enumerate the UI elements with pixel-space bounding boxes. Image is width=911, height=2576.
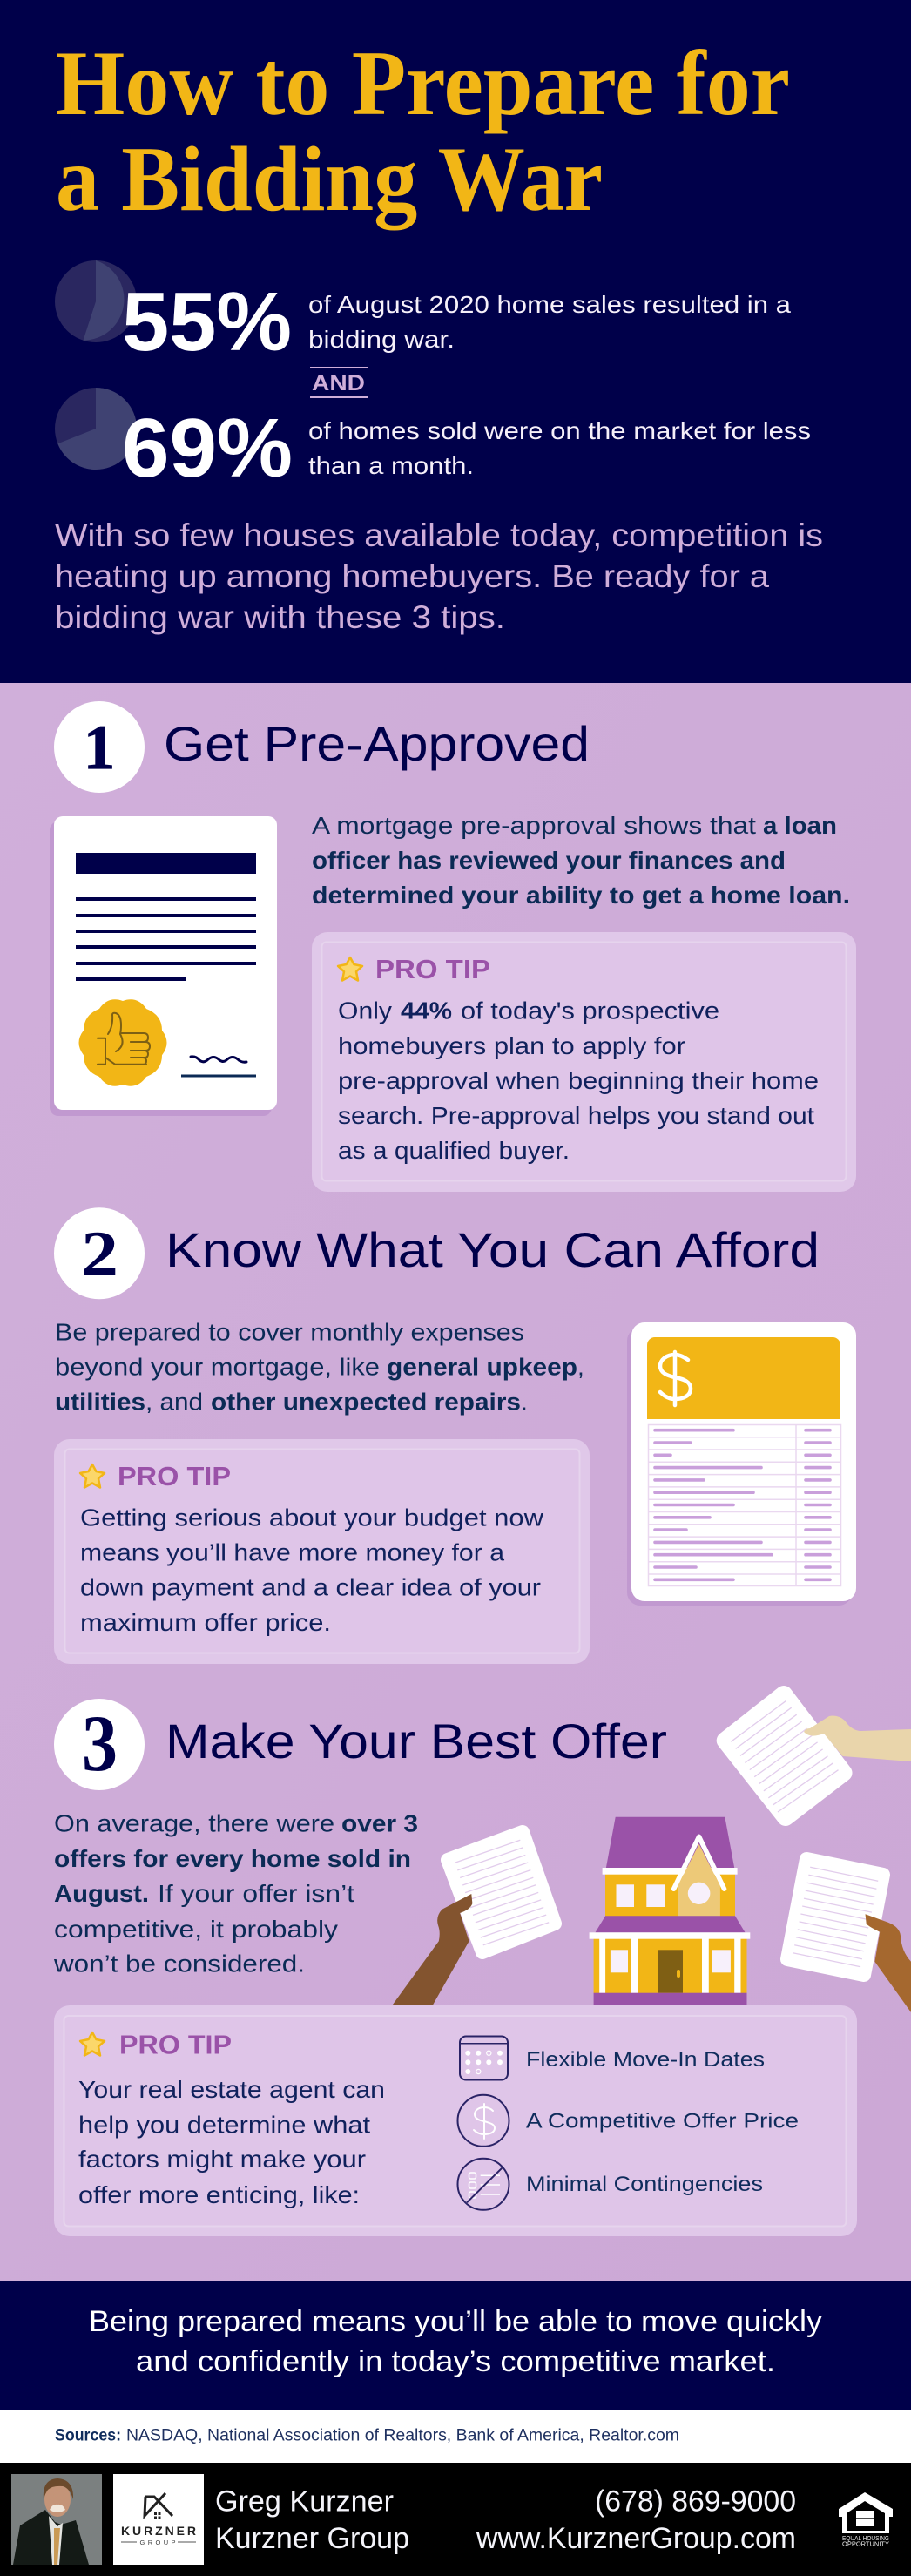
contact details bbox=[476, 2485, 796, 2555]
sources: Sources: bbox=[55, 2427, 121, 2445]
stat: 69 percent: than a month. bbox=[308, 452, 474, 479]
pro tip heading: PRO TIP bbox=[119, 2030, 232, 2059]
pro tip text: help you determine what bbox=[78, 2112, 370, 2139]
icon: equal housing opportunity: EQUAL HOUSING bbox=[842, 2536, 889, 2542]
panel: pro tip 3 bbox=[54, 2005, 857, 2236]
step 1 text: a loan bbox=[763, 812, 837, 839]
step 3 text: offers for every home sold in bbox=[54, 1845, 411, 1872]
panel: tips background bbox=[0, 683, 911, 2281]
pro tip text: homebuyers plan to apply for bbox=[338, 1032, 685, 1059]
illustration: offers around a house bbox=[392, 1694, 911, 2012]
icon: crossed-out list bbox=[458, 2159, 509, 2210]
title bbox=[56, 32, 790, 230]
step 2 text: , bbox=[577, 1354, 584, 1381]
icon: approved document bbox=[50, 816, 277, 1116]
step 1 text: A mortgage pre-approval shows that bbox=[312, 812, 756, 839]
agent footer bbox=[0, 2463, 911, 2576]
step 2 heading: Know What You Can Afford bbox=[165, 1222, 820, 1277]
step 3 text: On average, there were bbox=[54, 1810, 334, 1836]
step 2 heading bbox=[54, 1207, 820, 1299]
label: flexible dates: Flexible Move-In Dates bbox=[526, 2048, 765, 2072]
pro tip text: down payment and a clear idea of your bbox=[80, 1573, 541, 1600]
company logo: GROUP bbox=[139, 2539, 176, 2546]
agent name bbox=[215, 2485, 409, 2555]
company logo: KURZNER bbox=[121, 2524, 196, 2538]
step 2 text: . bbox=[521, 1389, 528, 1416]
budget table bbox=[648, 1425, 841, 1585]
pro tip text: maximum offer price. bbox=[80, 1609, 331, 1636]
closing banner bbox=[0, 2281, 911, 2410]
step 3 text: over 3 bbox=[341, 1810, 418, 1836]
agent name: Kurzner Group bbox=[215, 2522, 409, 2555]
icon: star bbox=[80, 1464, 105, 1488]
company logo bbox=[113, 2474, 204, 2565]
stat: 55 percent: bidding war. bbox=[308, 326, 455, 353]
label: offer price: A Competitive Offer Price bbox=[526, 2110, 799, 2133]
paper: top right bbox=[725, 1694, 843, 1817]
pro tip heading: PRO TIP bbox=[118, 1461, 231, 1491]
icon: budget sheet bbox=[627, 1322, 856, 1606]
intro text: bidding war with these 3 tips. bbox=[55, 599, 505, 635]
step 2 text: other unexpected repairs bbox=[211, 1389, 521, 1416]
panel: pro tip 1 bbox=[312, 932, 856, 1192]
step 1 heading: 1 bbox=[84, 713, 115, 782]
step 3 text bbox=[53, 1810, 418, 1978]
step 2 text: beyond your mortgage, like bbox=[55, 1354, 380, 1381]
stat: 55 percent bbox=[122, 275, 791, 368]
icon: star bbox=[338, 957, 362, 981]
pro tip text: Getting serious about your budget now bbox=[80, 1504, 544, 1531]
pro tip text: of today's prospective bbox=[461, 997, 719, 1024]
stat: 69 percent bbox=[122, 402, 811, 495]
stat: 69 percent: 69% bbox=[122, 402, 293, 495]
paper: left bbox=[448, 1832, 555, 1952]
pro tip text bbox=[338, 997, 819, 1164]
panel: pro tip 2 bbox=[54, 1439, 590, 1664]
and divider bbox=[310, 367, 368, 398]
intro text: heating up among homebuyers. Be ready for a bbox=[55, 558, 769, 594]
icon: calendar bbox=[460, 2037, 508, 2080]
pro tip text: offer more enticing, like: bbox=[78, 2181, 360, 2208]
step 2 text: Be prepared to cover monthly expenses bbox=[55, 1319, 524, 1346]
stat: 55 percent: of August 2020 home sales resulted in a bbox=[308, 291, 791, 318]
pro tip text: pre-approval when beginning their home bbox=[338, 1067, 819, 1094]
agent photo bbox=[11, 2474, 102, 2565]
pro tip text: Only bbox=[338, 997, 392, 1024]
step 3 text: If your offer isn’t bbox=[158, 1880, 354, 1907]
signature bbox=[181, 1057, 256, 1077]
step 3 heading: Make Your Best Offer bbox=[165, 1714, 667, 1768]
pro tip text: 44% bbox=[401, 997, 452, 1024]
pro tip text: as a qualified buyer. bbox=[338, 1137, 570, 1164]
contact details: (678) 869-9000 bbox=[595, 2485, 796, 2519]
and divider: AND bbox=[312, 371, 365, 396]
sources bbox=[0, 2410, 911, 2463]
sources: NASDAQ, National Association of Realtors, Bank of America, Realtor.com bbox=[126, 2427, 679, 2445]
closing banner: and confidently in today’s competitive market. bbox=[136, 2345, 775, 2378]
step 2 text: , and bbox=[145, 1389, 203, 1416]
label: contingencies: Minimal Contingencies bbox=[526, 2173, 763, 2196]
stat: 55 percent: 55% bbox=[122, 275, 292, 368]
icon: dollar circle bbox=[458, 2095, 509, 2147]
pro tip text: means you’ll have more money for a bbox=[80, 1538, 504, 1565]
step 1 heading bbox=[54, 701, 590, 793]
pie chart: 55 percent bbox=[55, 260, 137, 342]
intro text: With so few houses available today, competition is bbox=[55, 517, 823, 553]
closing banner: Being prepared means you’ll be able to move quickly bbox=[89, 2305, 822, 2338]
step 3 heading: 3 bbox=[82, 1699, 118, 1788]
house bbox=[590, 1817, 750, 2005]
hand: top right bbox=[804, 1716, 911, 1761]
title: a Bidding War bbox=[56, 128, 603, 230]
step 2 text bbox=[55, 1319, 584, 1416]
pro tip text: factors might make your bbox=[78, 2146, 366, 2173]
step 1 text bbox=[312, 812, 850, 909]
step 1 text: officer has reviewed your finances and bbox=[312, 847, 786, 874]
step 3 text: competitive, it probably bbox=[54, 1916, 338, 1943]
header panel bbox=[0, 0, 911, 683]
pro tip text: Your real estate agent can bbox=[78, 2076, 385, 2103]
icon: thumbs up seal bbox=[78, 999, 167, 1086]
step 1 heading: Get Pre-Approved bbox=[164, 716, 590, 771]
pro tip text: search. Pre-approval helps you stand out bbox=[338, 1102, 814, 1129]
pie chart: 69 percent bbox=[55, 388, 137, 470]
step 3 text: won’t be considered. bbox=[53, 1951, 305, 1978]
pro tip heading: PRO TIP bbox=[375, 954, 490, 984]
icon: star bbox=[80, 2032, 105, 2056]
intro text bbox=[55, 517, 823, 635]
agent name: Greg Kurzner bbox=[215, 2485, 394, 2519]
step 3 heading bbox=[54, 1699, 667, 1790]
step 3 text: August. bbox=[54, 1880, 149, 1907]
icon: equal housing opportunity bbox=[839, 2492, 893, 2547]
hand: right bbox=[866, 1914, 911, 2012]
pro tip text bbox=[80, 1504, 544, 1636]
contact details: www.KurznerGroup.com bbox=[476, 2522, 796, 2555]
pro tip text bbox=[78, 2076, 385, 2208]
paper: right bbox=[787, 1859, 883, 1975]
stat: 69 percent: of homes sold were on the market for less bbox=[308, 417, 811, 444]
step 2 text: utilities bbox=[55, 1389, 145, 1416]
hand: left bbox=[392, 1894, 472, 2005]
step 2 text: general upkeep bbox=[387, 1354, 577, 1381]
icon: equal housing opportunity: OPPORTUNITY bbox=[842, 2542, 889, 2547]
title: How to Prepare for bbox=[56, 32, 790, 134]
step 1 text: determined your ability to get a home loan. bbox=[312, 882, 850, 909]
step 2 heading: 2 bbox=[81, 1219, 118, 1290]
